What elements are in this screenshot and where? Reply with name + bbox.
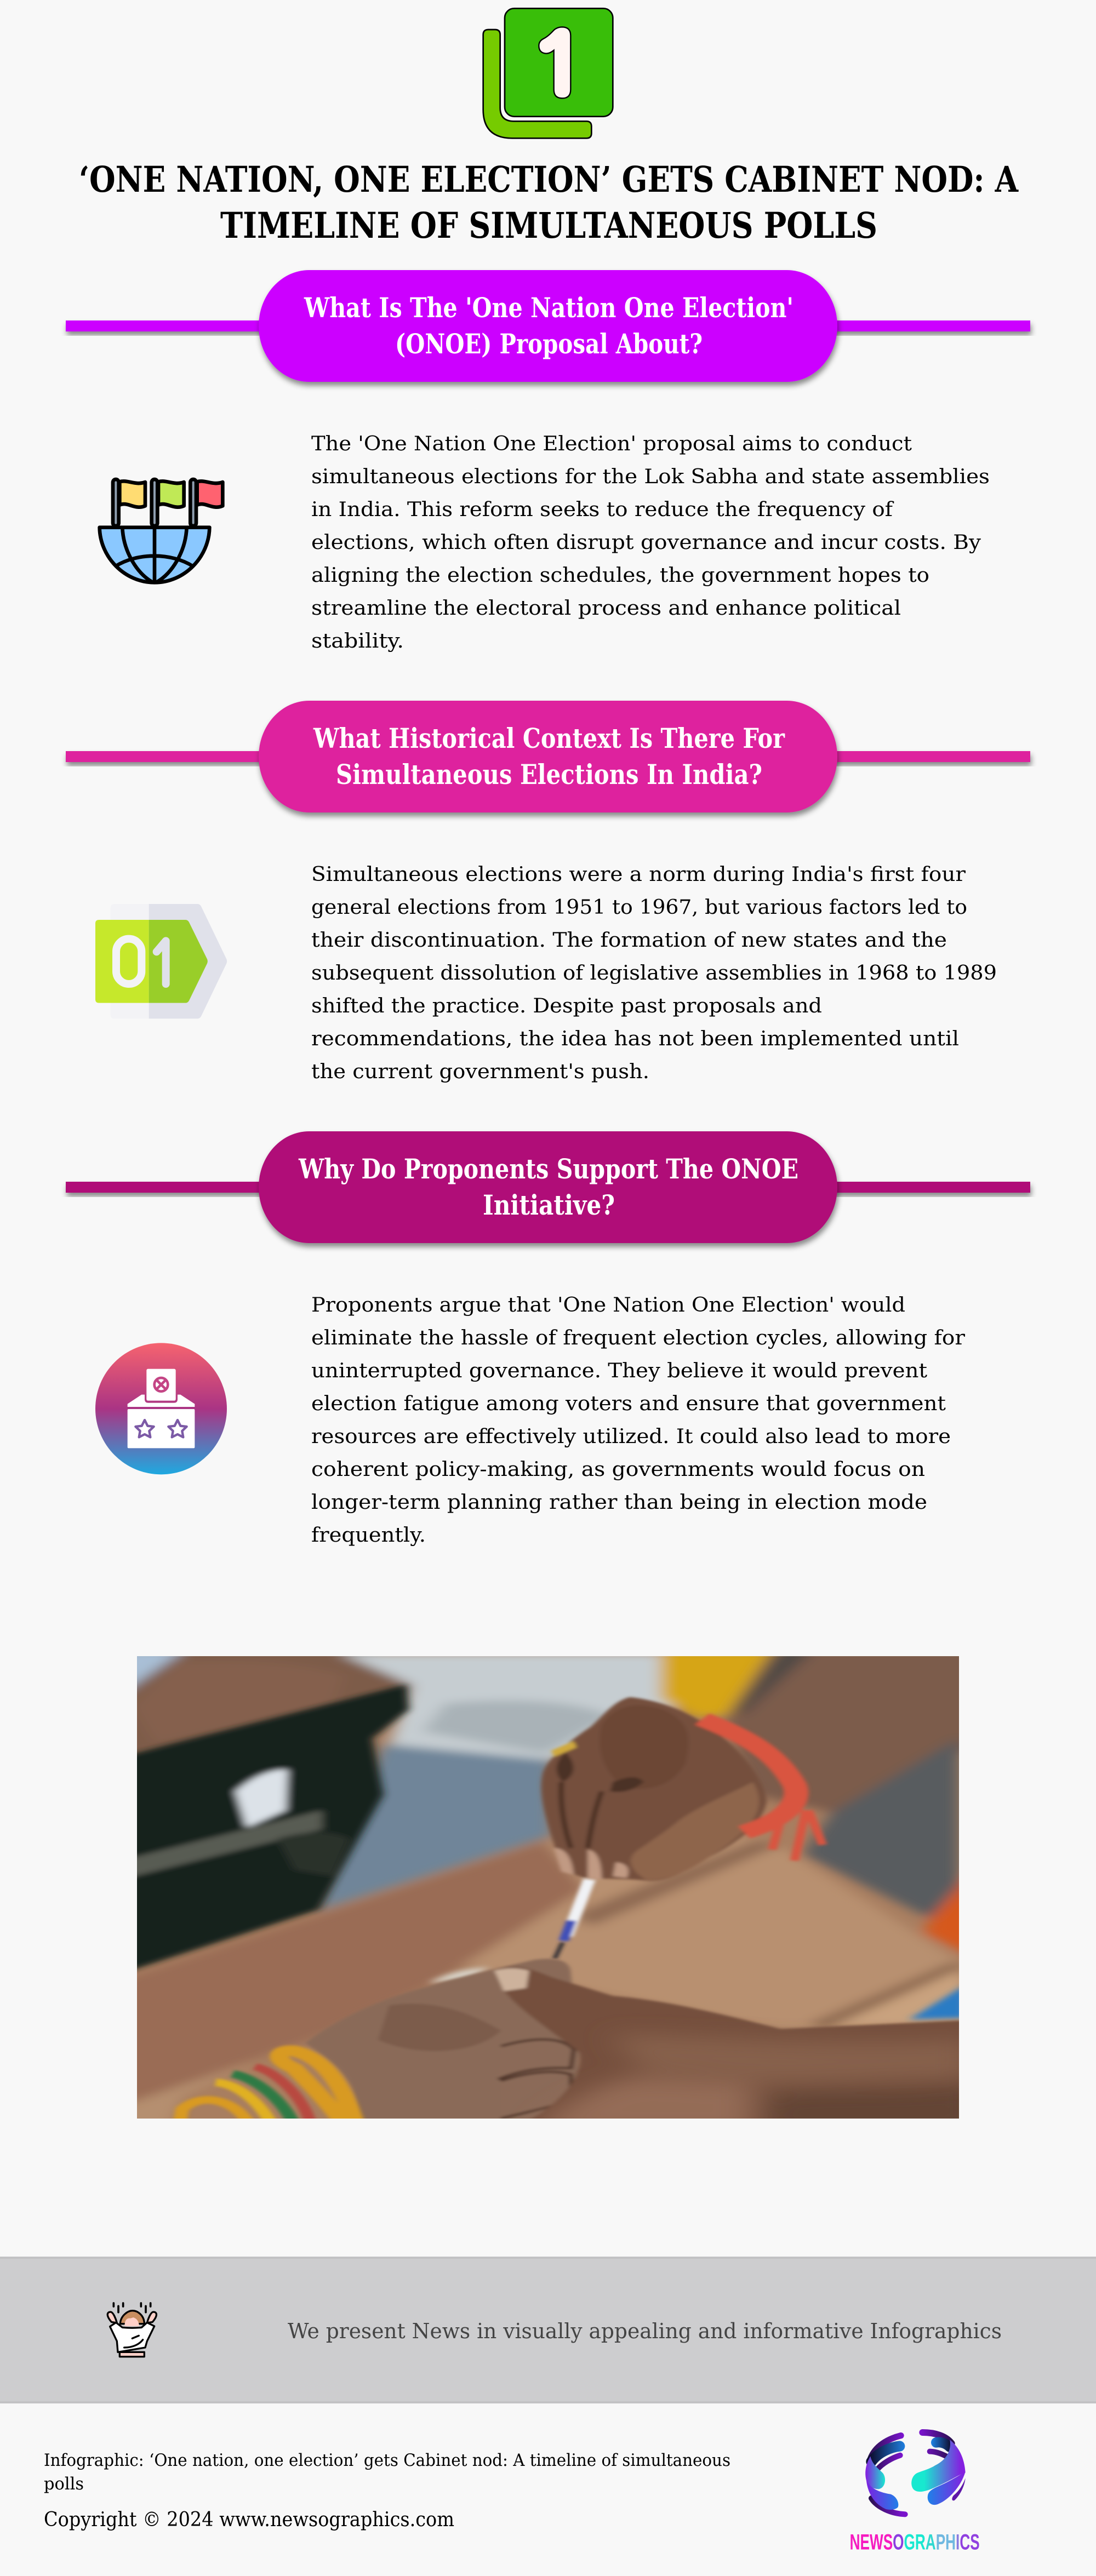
section 1 heading bar: (ONOE) Proposal About?	[395, 328, 703, 360]
body text 3: eliminate the hassle of frequent election cycles, allowing for	[311, 1327, 966, 1349]
body text 3: Proponents argue that 'One Nation One Election' would	[311, 1294, 905, 1316]
icon: ballot box in gradient circle	[95, 1343, 227, 1474]
footer band	[0, 2257, 1096, 2403]
body text 2: the current government's push.	[311, 1061, 649, 1083]
body text 3: resources are effectively utilized. It could also lead to more	[311, 1426, 951, 1448]
body text 2: their discontinuation. The formation of new states and the	[311, 929, 947, 952]
tagline: We present News in visually appealing and informative Infographics	[288, 2319, 1002, 2343]
photo: inked finger at polling station	[137, 1656, 959, 2119]
lower hands	[305, 1959, 982, 2134]
body text 2: subsequent dissolution of legislative assemblies in 1968 to 1989	[311, 962, 997, 984]
body text 2: Simultaneous elections were a norm during India's first four	[311, 863, 966, 886]
body text 2	[311, 863, 997, 1083]
footer credits: polls	[44, 2474, 84, 2494]
section 3 heading bar	[66, 1131, 1030, 1243]
icon: number 1 badge	[483, 8, 613, 138]
section 3 heading bar: Why Do Proponents Support The ONOE	[298, 1153, 798, 1185]
icon: person with raised hands	[107, 2303, 156, 2357]
body text 1: simultaneous elections for the Lok Sabha and state assemblies	[311, 466, 990, 488]
body text 3: frequently.	[311, 1524, 426, 1547]
body text 3: uninterrupted governance. They believe it would prevent	[311, 1360, 928, 1382]
body text 1: in India. This reform seeks to reduce the frequency of	[311, 499, 894, 521]
upper hand	[541, 1697, 823, 1959]
body text 1: stability.	[311, 630, 404, 652]
body text 3: election fatigue among voters and ensure that government	[311, 1393, 946, 1415]
icon: globe with three flags	[100, 479, 222, 582]
body text 1: aligning the election schedules, the government hopes to	[311, 564, 929, 587]
body text 1: streamline the electoral process and enhance political	[311, 597, 901, 620]
icon: number 01 arrow tag	[95, 904, 227, 1018]
section 2 heading bar	[66, 701, 1030, 812]
section 3 heading bar: Initiative?	[483, 1189, 615, 1221]
body text 2: shifted the practice. Despite past proposals and	[311, 995, 822, 1017]
body text 3: coherent policy-making, as governments would focus on	[311, 1458, 925, 1481]
body text 1: elections, which often disrupt governance and incur costs. By	[311, 531, 981, 554]
logo: Newsographics	[850, 2432, 980, 2554]
body text 3: longer-term planning rather than being in election mode	[311, 1491, 927, 1514]
footer credits	[44, 2451, 730, 2531]
footer credits: Infographic: ‘One nation, one election’ gets Cabinet nod: A timeline of simultaneous	[44, 2451, 730, 2470]
body text 3	[311, 1294, 966, 1547]
logo: Newsographics: NEWSOGRAPHICS	[850, 2530, 980, 2554]
body text 1: The 'One Nation One Election' proposal aims to conduct	[311, 433, 912, 455]
section 1 heading bar: What Is The 'One Nation One Election'	[304, 291, 794, 324]
section 2 heading bar: Simultaneous Elections In India?	[336, 758, 762, 791]
title	[79, 159, 1019, 247]
body text 2: general elections from 1951 to 1967, but various factors led to	[311, 896, 967, 919]
footer credits: Copyright © 2024 www.newsographics.com	[44, 2509, 454, 2531]
body text 1	[311, 433, 990, 652]
section 1 heading bar	[66, 270, 1030, 382]
title: TIMELINE OF SIMULTANEOUS POLLS	[220, 205, 877, 247]
section 2 heading bar: What Historical Context Is There For	[313, 722, 785, 754]
body text 2: recommendations, the idea has not been implemented until	[311, 1028, 959, 1050]
